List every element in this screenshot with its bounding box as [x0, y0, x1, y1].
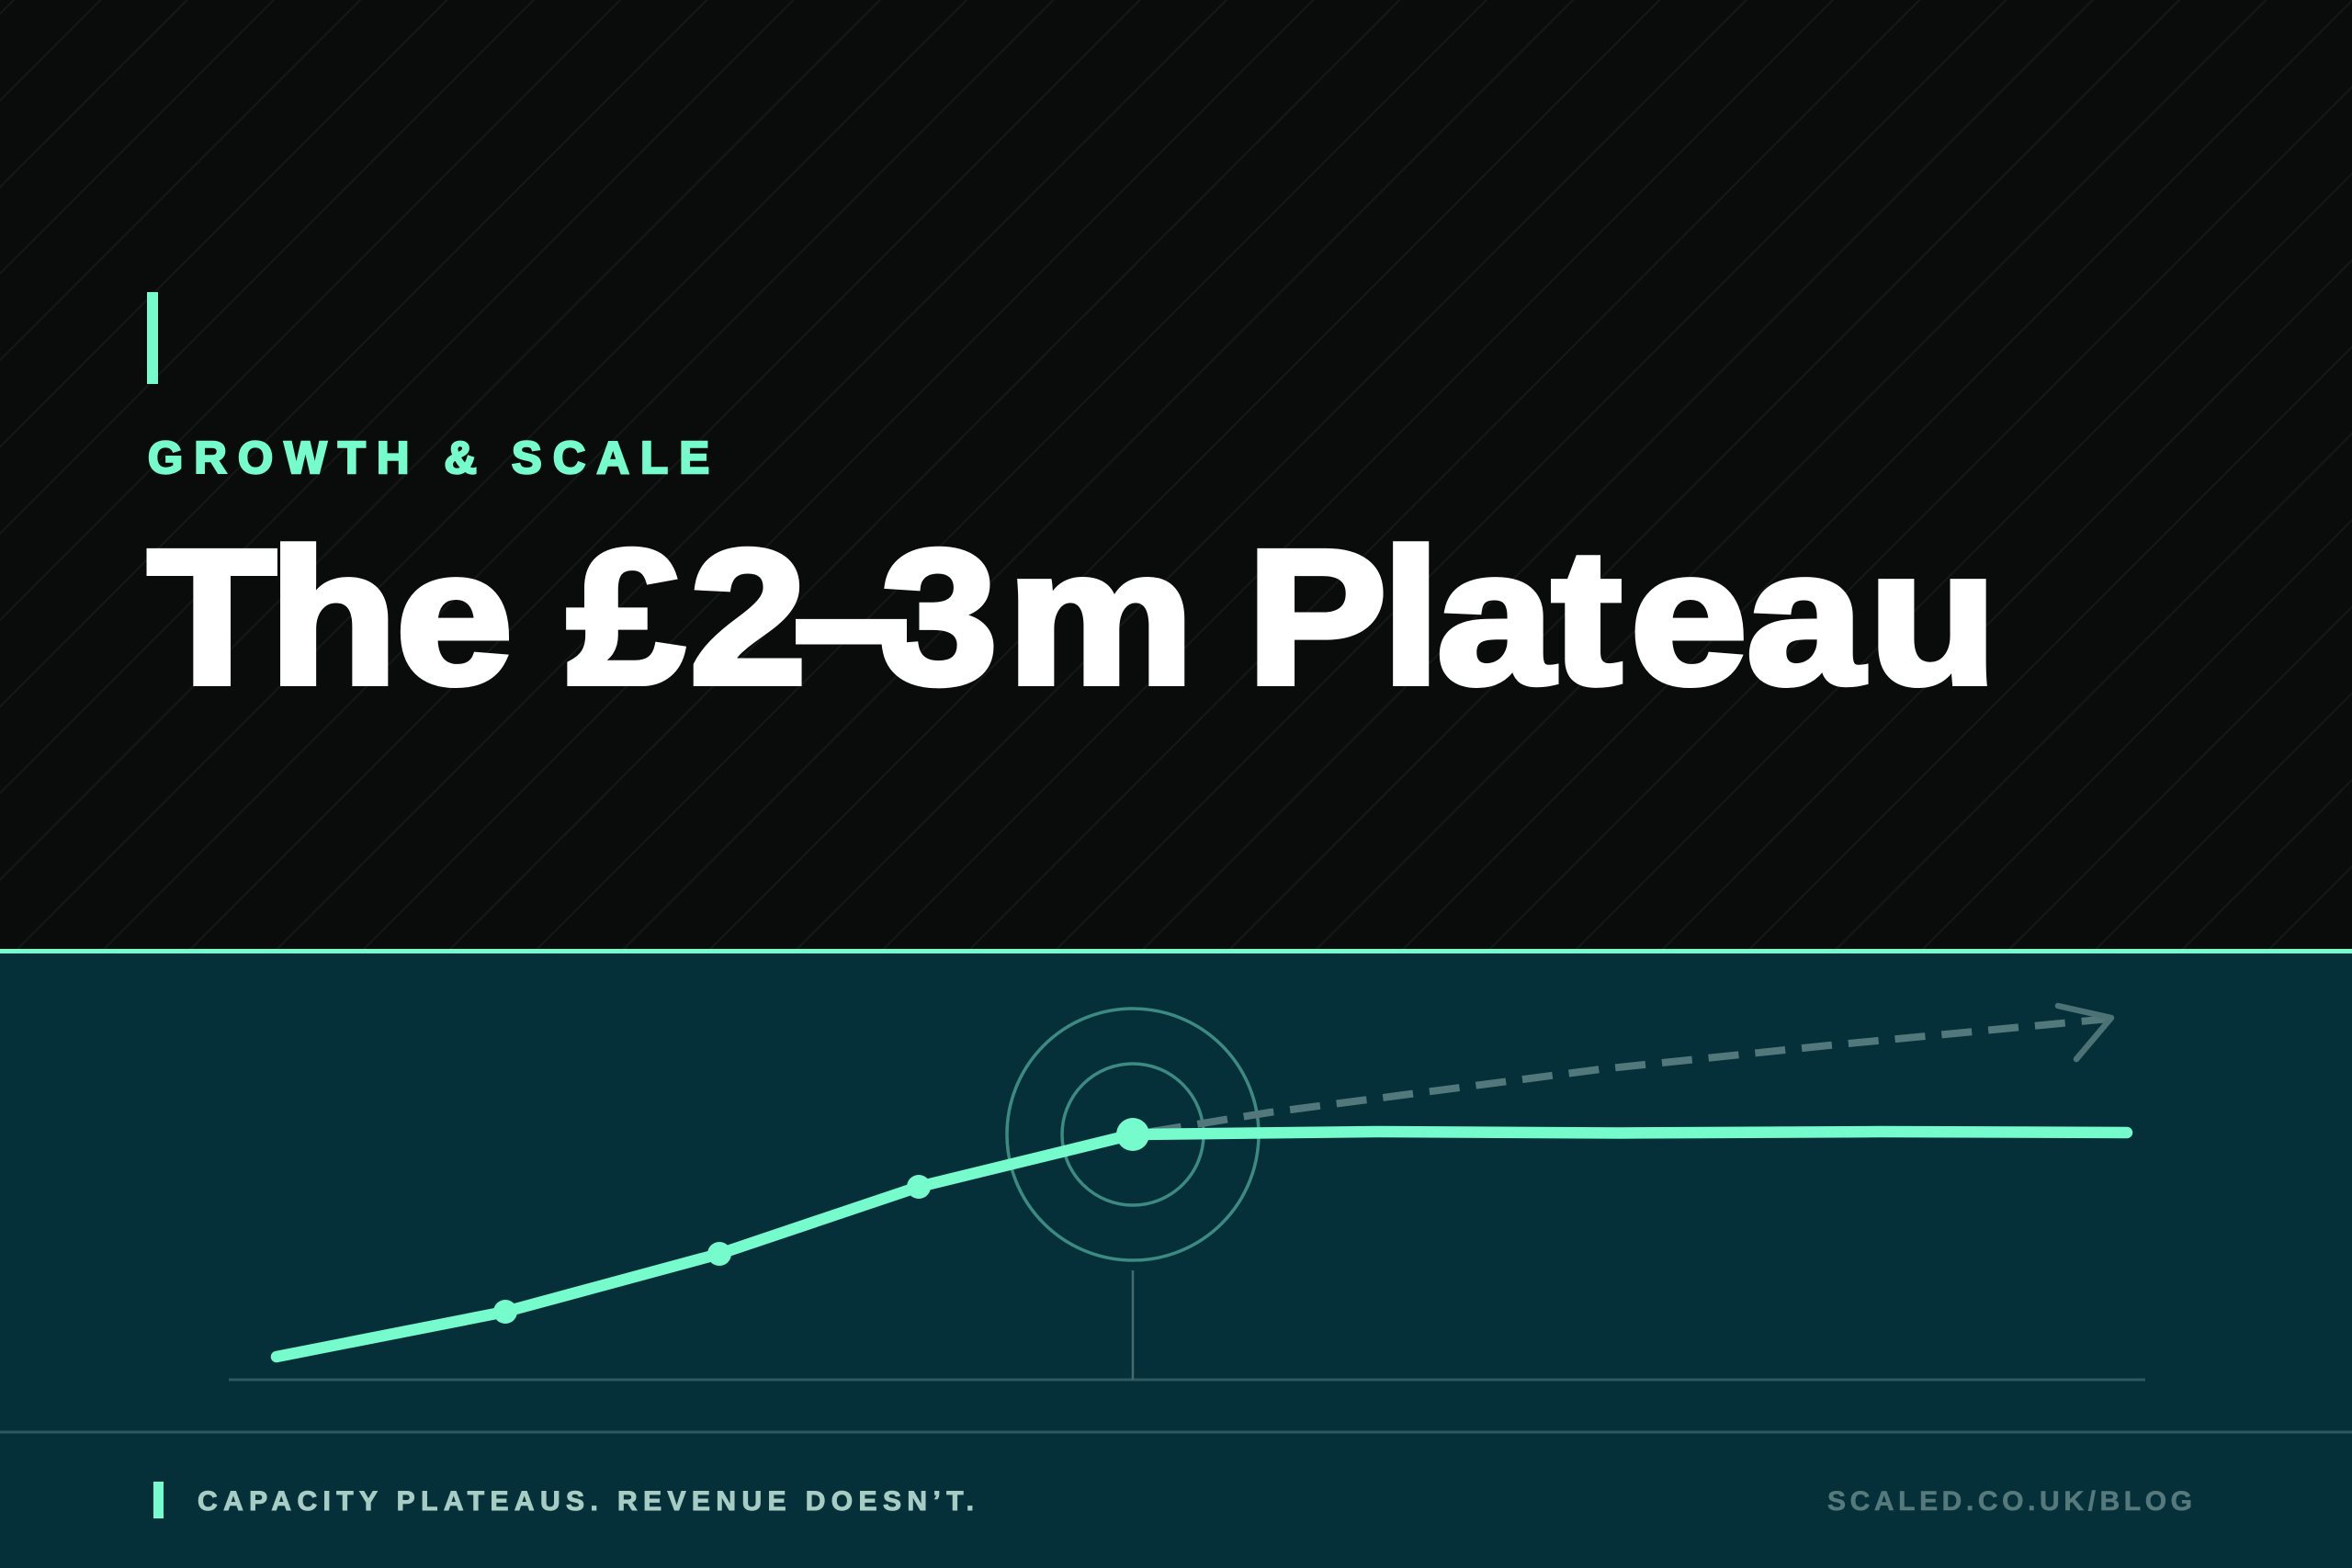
dashed projected growth line: [1151, 1019, 2109, 1132]
chart baseline axis: [229, 1378, 2145, 1382]
footer accent bar: [153, 1482, 164, 1518]
plateau point: [1116, 1118, 1149, 1151]
eyebrow: category label: GROWTH & SCALE: [148, 434, 709, 483]
footer divider: [0, 1431, 2352, 1433]
footer url: SCALED.CO.UK/BLOG: [1827, 1486, 2192, 1517]
chart: growth plateau line chart: [229, 1006, 2145, 1380]
data points on revenue line: [493, 1175, 931, 1324]
divider: mint rule between panels: [0, 949, 2352, 953]
panel: teal chart and footer background: [0, 952, 2352, 1568]
actual revenue line: [277, 1132, 2127, 1357]
accent bar above eyebrow: [147, 292, 158, 384]
arrow head on projected line: [2058, 1006, 2111, 1059]
footer tagline: CAPACITY PLATEAUS. REVENUE DOESN’T.: [198, 1486, 974, 1517]
target rings around plateau point: [1007, 1009, 1259, 1260]
plateau marker tick: [1132, 1270, 1134, 1380]
title: The £2–3m Plateau: [148, 511, 1997, 724]
panel: dark header background: [0, 0, 2352, 950]
